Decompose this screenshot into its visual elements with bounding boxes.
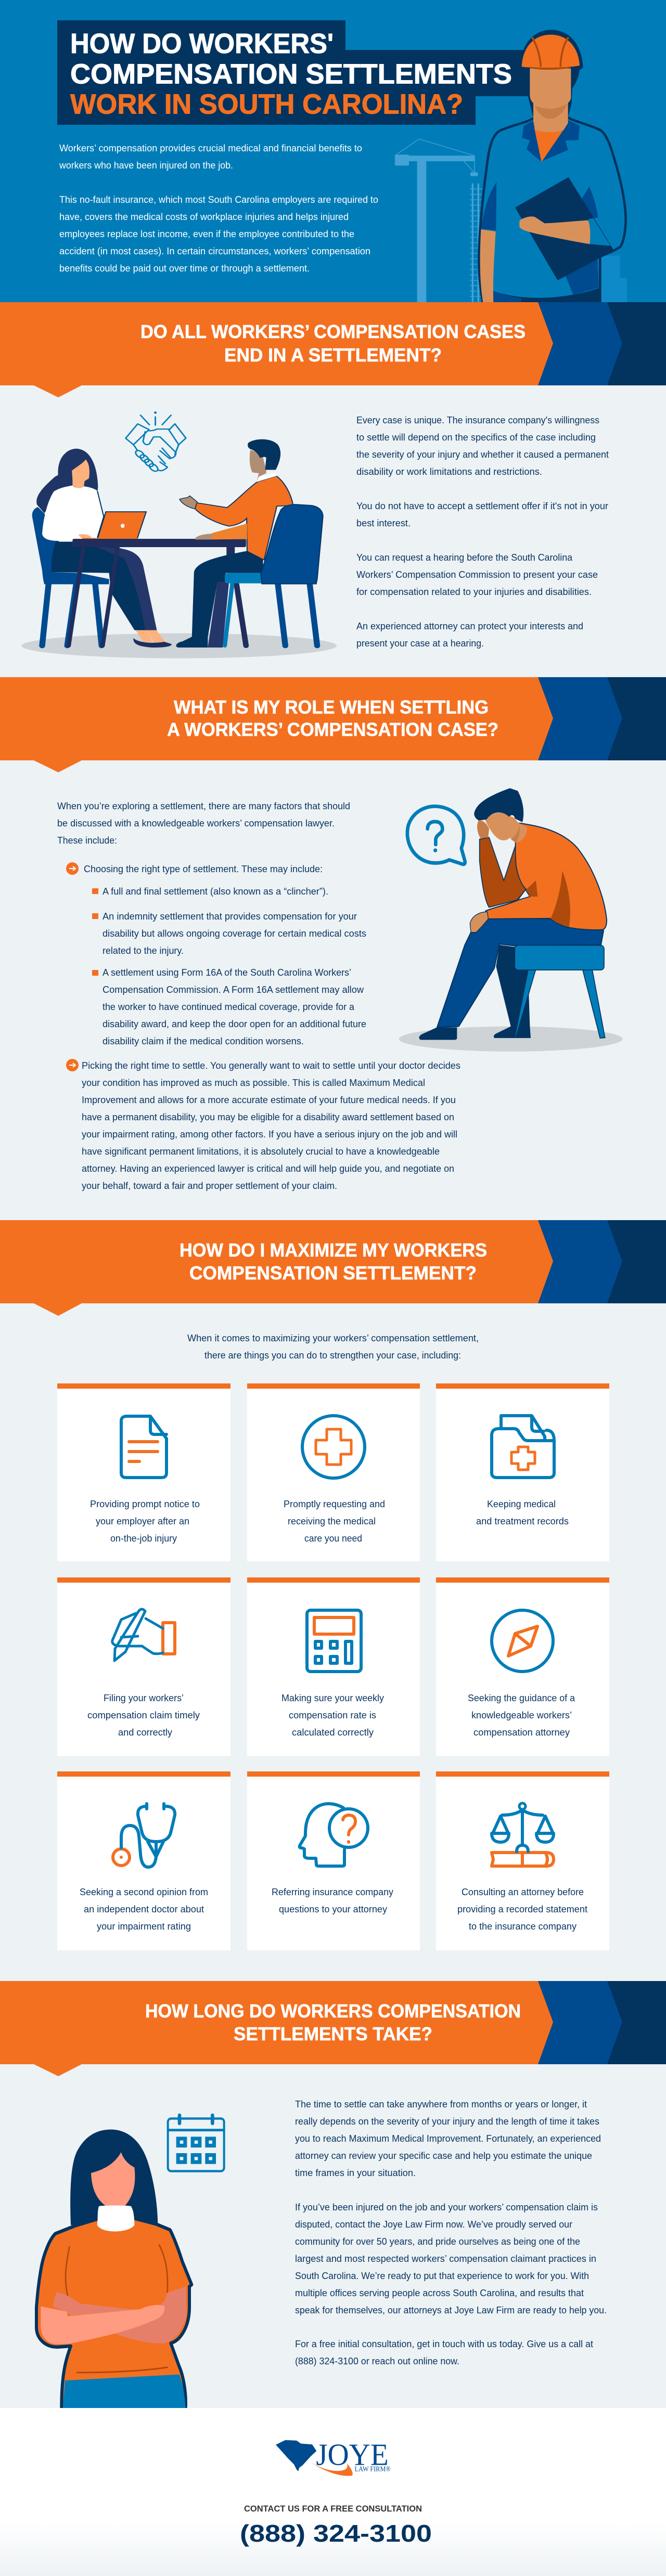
text: maximize intro — [187, 1333, 479, 1361]
text: how long explanation: For a free initial consultation, get in touch with us today. Give us a call at — [295, 2339, 593, 2349]
text: settlement factors: Choosing the right type of settlement. These may include: — [84, 864, 323, 874]
card: weekly rate: compensation rate is — [289, 1710, 376, 1720]
icon: scales on book — [492, 1803, 554, 1866]
text: how long explanation: South Carolina. We’re ready to put that experience to work for you. With — [295, 2271, 589, 2281]
text: settlement explanation: for compensation related to your injuries and disabilities. — [356, 587, 592, 597]
text: settlement factors: disability award, and keep the door open for an additional future — [103, 1019, 366, 1029]
text: settlement explanation — [356, 415, 609, 649]
panel: hero — [0, 0, 666, 302]
card: filing claim: and correctly — [118, 1727, 172, 1738]
card: filing claim — [57, 1577, 230, 1756]
text: settlement factors: your condition has improved as much as possible. This is called Maximum Medical — [82, 1078, 425, 1088]
card: prompt notice: your employer after an — [96, 1516, 189, 1526]
text: settlement factors: the worker to have continued medical coverage, provide for a — [103, 1002, 355, 1012]
text: how long explanation: really depends on the severity of your injury and the length of time it takes — [295, 2116, 599, 2127]
text: how long explanation: The time to settle can take anywhere from months or years or longer, it — [295, 2099, 587, 2109]
card: recorded statement: providing a recorded statement — [457, 1904, 587, 1914]
text: how long explanation: If you’ve been injured on the job and your workers’ compensation claim is — [295, 2202, 598, 2212]
panel: footer — [0, 2408, 666, 2576]
card: insurance questions — [247, 1771, 420, 1950]
left chair — [32, 507, 109, 646]
card: weekly rate — [247, 1577, 420, 1756]
text: how long explanation: (888) 324-3100 or reach out online now. — [295, 2356, 459, 2366]
text: settlement explanation: present your case at a hearing. — [356, 638, 484, 649]
icon: handshake — [125, 412, 186, 473]
card: second opinion: an independent doctor about — [84, 1904, 204, 1914]
intro text: accident (in most cases). In certain circumstances, workers’ compensation — [59, 246, 370, 256]
card: insurance questions: Referring insurance company — [272, 1887, 393, 1897]
banner: how long — [0, 1981, 666, 2076]
intro text — [59, 143, 378, 274]
icon: arrow bullet — [66, 862, 79, 875]
text: how long explanation: you to reach Maximum Medical Improvement. Fortunately, an experienced — [295, 2133, 601, 2144]
text: settlement factors: Picking the right time to settle. You generally want to wait to settle until your doctor decides — [82, 1060, 460, 1071]
card: medical records: and treatment records — [476, 1516, 569, 1526]
text: settlement factors: disability claim if the medical condition worsens. — [103, 1036, 304, 1046]
logo: Joye Law Firm: JOYE — [316, 2437, 389, 2471]
card: medical records: Keeping medical — [487, 1499, 556, 1509]
text: settlement factors: Improvement and allows for a more accurate estimate of your future medical needs. If you — [82, 1095, 456, 1105]
card: attorney guidance — [436, 1577, 609, 1756]
icon: medical cross in circle — [302, 1416, 365, 1478]
banner: my role: WHAT IS MY ROLE WHEN SETTLING — [174, 696, 489, 718]
text: settlement factors: have significant permanent limitations, it is absolutely crucial to have a knowledgeable — [82, 1146, 440, 1157]
banner: how long: HOW LONG DO WORKERS COMPENSATION — [145, 2000, 521, 2022]
text: settlement factors: An indemnity settlement that provides compensation for your — [103, 911, 357, 922]
card: medical care: Promptly requesting and — [284, 1499, 385, 1509]
contact heading: CONTACT US FOR A FREE CONSULTATION — [244, 2504, 422, 2514]
text: settlement factors — [57, 801, 460, 1191]
right chair — [225, 504, 323, 646]
phone number: (888) 324-3100 — [240, 2520, 432, 2547]
card: recorded statement: to the insurance company — [469, 1921, 577, 1932]
text: how long explanation: multiple offices serving people across South Carolina, and results that — [295, 2288, 584, 2298]
title block: COMPENSATION SETTLEMENTS — [70, 58, 512, 89]
card: attorney guidance: Seeking the guidance of a — [468, 1693, 575, 1703]
card: medical records — [436, 1383, 609, 1561]
card: weekly rate: Making sure your weekly — [281, 1693, 384, 1703]
text: how long explanation: time frames in your situation. — [295, 2168, 416, 2178]
banner: do all cases settle — [0, 302, 666, 397]
text: settlement factors: Compensation Commission. A Form 16A settlement may allow — [103, 985, 364, 995]
text: settlement factors: A full and final settlement (also known as a “clincher”). — [103, 886, 328, 897]
text: settlement factors: your behalf, toward a fair and proper settlement of your claim. — [82, 1181, 337, 1191]
icon: document — [121, 1416, 166, 1478]
card: recorded statement: Consulting an attorney before — [462, 1887, 584, 1897]
icon: compass — [492, 1610, 553, 1672]
text: how long explanation: speak for themselves, our attorneys at Joye Law Firm are ready to help you. — [295, 2305, 607, 2315]
card: medical care: care you need — [304, 1533, 362, 1544]
title block: WORK IN SOUTH CAROLINA? — [70, 88, 463, 120]
logo: Joye Law Firm — [276, 2437, 391, 2476]
text: settlement factors: attorney. Having an experienced lawyer is critical and will help guide you, and negotiate on — [82, 1163, 454, 1174]
table — [69, 539, 246, 646]
text: settlement explanation: You can request a hearing before the South Carolina — [356, 552, 573, 563]
card: second opinion — [57, 1771, 230, 1950]
text: settlement explanation: Every case is unique. The insurance company's willingness — [356, 415, 599, 425]
text: settlement explanation: the severity of your injury and whether it caused a permanent — [356, 449, 609, 460]
icon: stethoscope — [113, 1804, 175, 1867]
banner: my role — [0, 677, 666, 772]
card: prompt notice — [57, 1383, 230, 1561]
illustration: construction worker — [479, 30, 626, 302]
text: maximize intro: there are things you can do to strengthen your case, including: — [204, 1350, 461, 1361]
text: settlement explanation: best interest. — [356, 518, 411, 528]
text: how long explanation: largest and most respected workers’ compensation claimant practices in — [295, 2254, 596, 2264]
card: attorney guidance: knowledgeable workers’ — [471, 1710, 572, 1720]
card: weekly rate: calculated correctly — [292, 1727, 374, 1738]
text: how long explanation — [295, 2099, 607, 2366]
intro text: have, covers the medical costs of workplace injuries and helps injured — [59, 212, 349, 222]
logo: Joye Law Firm: LAW FIRM® — [355, 2465, 391, 2473]
stool — [515, 946, 605, 1038]
banner: my role: A WORKERS’ COMPENSATION CASE? — [167, 719, 498, 740]
intro text: This no-fault insurance, which most South Carolina employers are required to — [59, 195, 378, 205]
card: medical care: receiving the medical — [288, 1516, 376, 1526]
icon: construction crane — [395, 139, 627, 302]
text: settlement explanation: to settle will depend on the specifics of the case including — [356, 432, 596, 443]
title block — [57, 20, 529, 125]
text: settlement factors: disability but allows ongoing coverage for certain medical costs — [103, 928, 366, 939]
card: prompt notice: on-the-job injury — [110, 1533, 177, 1544]
card: medical care — [247, 1383, 420, 1561]
intro text: benefits could be paid out over time or through a settlement. — [59, 263, 310, 274]
icon: head with question mark — [300, 1804, 368, 1866]
intro text: workers who have been injured on the job. — [59, 160, 233, 171]
text: settlement factors: your impairment rating, among other factors. If you have a serious injury on the job and will — [82, 1129, 457, 1140]
icon: arrow bullet — [66, 1059, 79, 1071]
intro text: employees replace lost income, even if the employee contributed to the — [59, 229, 354, 239]
card: filing claim: compensation claim timely — [87, 1710, 200, 1720]
text: how long explanation: community for over 50 years, and pride ourselves as being one of the — [295, 2236, 580, 2247]
icon: calendar — [168, 2115, 224, 2171]
card: prompt notice: Providing prompt notice to — [90, 1499, 200, 1509]
text: settlement factors: be discussed with a knowledgeable workers’ compensation lawyer. — [57, 818, 335, 829]
man — [176, 439, 293, 648]
banner: maximize settlement — [0, 1220, 666, 1316]
card: filing claim: Filing your workers’ — [104, 1693, 184, 1703]
laptop — [83, 512, 146, 540]
text: how long explanation: attorney can review your specific case and help you estimate the unique — [295, 2151, 592, 2161]
card: second opinion: Seeking a second opinion from — [80, 1887, 208, 1897]
banner: maximize settlement: COMPENSATION SETTLEMENT? — [189, 1262, 477, 1284]
illustration: worried man on stool — [399, 788, 623, 1052]
illustration: woman with neck brace and calendar — [36, 2115, 224, 2408]
text: settlement factors: When you’re exploring a settlement, there are many factors that should — [57, 801, 350, 811]
text: how long explanation: disputed, contact the Joye Law Firm now. We’ve proudly served our — [295, 2219, 572, 2230]
banner: do all cases settle: DO ALL WORKERS’ COMPENSATION CASES — [140, 321, 526, 342]
text: settlement factors: have a permanent disability, you may be eligible for a disability award settlement based on — [82, 1112, 454, 1122]
banner: how long: SETTLEMENTS TAKE? — [234, 2023, 432, 2044]
text: settlement factors: A settlement using Form 16A of the South Carolina Workers’ — [103, 967, 351, 978]
banner: maximize settlement: HOW DO I MAXIMIZE MY WORKERS — [180, 1239, 487, 1261]
text: settlement factors: related to the injury. — [103, 946, 184, 956]
card: insurance questions: questions to your attorney — [279, 1904, 387, 1914]
icon: question speech bubble — [407, 806, 465, 864]
icon: calculator — [307, 1610, 361, 1672]
text: settlement explanation: An experienced attorney can protect your interests and — [356, 621, 583, 631]
card: attorney guidance: compensation attorney — [473, 1727, 570, 1738]
card: second opinion: your impairment rating — [97, 1921, 191, 1932]
text: settlement explanation: Workers’ Compensation Commission to present your case — [356, 569, 598, 580]
icon: hand writing — [112, 1609, 175, 1661]
text: settlement explanation: disability or work limitations and restrictions. — [356, 467, 542, 477]
text: maximize intro: When it comes to maximizing your workers’ compensation settlement, — [187, 1333, 479, 1343]
icon: medical folder — [492, 1416, 554, 1478]
intro text: Workers’ compensation provides crucial medical and financial benefits to — [59, 143, 362, 153]
text: settlement factors: These include: — [57, 835, 117, 846]
title block: HOW DO WORKERS' — [70, 28, 334, 59]
woman — [36, 449, 172, 648]
text: settlement explanation: You do not have to accept a settlement offer if it's not in your — [356, 501, 608, 511]
card: recorded statement — [436, 1771, 609, 1950]
banner: do all cases settle: END IN A SETTLEMENT? — [224, 344, 442, 366]
illustration: meeting at a table — [21, 412, 337, 658]
